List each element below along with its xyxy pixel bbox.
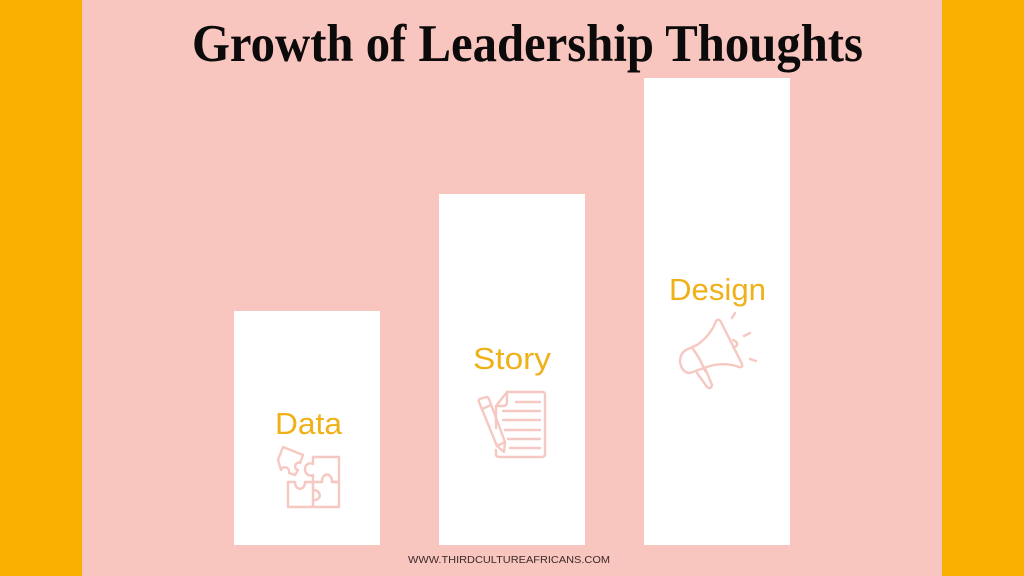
title: Growth of Leadership Thoughts xyxy=(192,15,863,73)
label: Story: Story xyxy=(473,341,552,376)
icon: document and pencil xyxy=(479,392,545,457)
icon: megaphone xyxy=(680,313,756,388)
bar: Design xyxy=(644,78,790,545)
bar: Story xyxy=(439,194,585,545)
icon: puzzle pieces xyxy=(278,447,339,507)
label: Design: Design xyxy=(669,272,766,307)
footer website: WWW.THIRDCULTUREAFRICANS.COM xyxy=(408,554,610,566)
bar: Data xyxy=(234,311,380,545)
label: Data: Data xyxy=(275,406,343,441)
